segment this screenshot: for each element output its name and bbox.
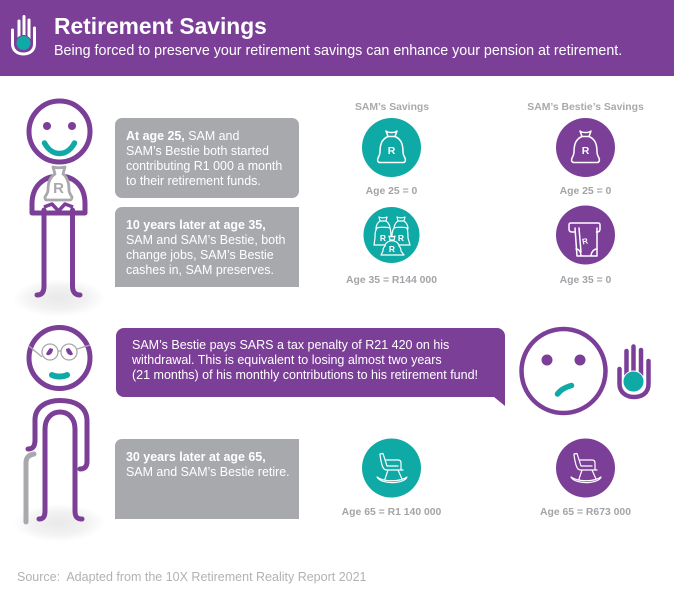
icon: SAM money bag age 25: R <box>388 145 396 157</box>
label: Bestie age 25: Age 25 = 0 <box>560 186 612 197</box>
heading: SAM's savings: SAM’s Savings <box>355 102 429 113</box>
icon: Bestie money bag age 25 <box>556 118 615 177</box>
icon: Bestie ATM cash age 35: R <box>581 236 589 246</box>
speech bubble: tax penalty: (21 months) of his monthly contributions to his retirement fund! <box>132 368 478 382</box>
icon: SAM money bags age 35: R <box>389 244 395 254</box>
panel: age 35 text: change jobs, SAM’s Bestie <box>126 248 274 262</box>
label: SAM age 25: Age 25 = 0 <box>366 186 418 197</box>
panel: age 65 text: 30 years later at age 65, <box>126 450 266 464</box>
character: SAM holding money bag <box>13 101 105 317</box>
panel: age 25 text: At age 25, SAM and <box>126 129 239 143</box>
icon: Bestie money bag age 25: R <box>582 145 590 157</box>
panel: age 65 text: SAM and SAM’s Bestie retire. <box>126 465 290 479</box>
panel: age 25 text: to their retirement funds. <box>126 174 261 188</box>
icon: glasses <box>29 344 90 360</box>
panel: age 35 text: cashes in, SAM preserves. <box>126 263 274 277</box>
heading: SAM's Bestie's savings: SAM’s Bestie’s Savings <box>527 102 644 113</box>
icon: Bestie ATM cash age 35 <box>556 206 615 264</box>
icon: stop hand <box>620 346 648 397</box>
icon: SAM money bags age 35: R <box>398 233 404 243</box>
icon: SAM money bags age 35 <box>364 207 420 263</box>
label: SAM age 65: Age 65 = R1 140 000 <box>342 507 442 518</box>
subtitle: Being forced to preserve your retirement savings can enhance your pension at retirement. <box>54 43 622 59</box>
icon: SAM rocking chair <box>362 438 421 498</box>
panel: age 35 text: SAM and SAM’s Bestie, both <box>126 233 286 247</box>
icon: SAM money bag age 25 <box>362 118 421 177</box>
icon: Bestie rocking chair <box>556 438 615 498</box>
icon: hand logo <box>12 16 34 54</box>
panel: age 35 text: 10 years later at age 35, <box>126 218 266 232</box>
icon: grey money bag: R <box>53 180 64 197</box>
character: sad face <box>522 329 606 413</box>
panel: age 25 text: SAM’s Bestie both started <box>126 144 269 158</box>
icon: grey money bag <box>45 167 72 200</box>
panel: age 25 text: contributing R1 000 a month <box>126 159 282 173</box>
source note: Source: Adapted from the 10X Retirement Reality Report 2021 <box>17 570 367 584</box>
panel: age 65 text <box>115 439 299 519</box>
speech bubble: tax penalty: withdrawal. This is equivalent to losing almost two years <box>131 353 442 367</box>
label: Bestie age 35: Age 35 = 0 <box>560 275 612 286</box>
label: SAM age 35: Age 35 = R144 000 <box>346 275 437 286</box>
panel: age 35 text <box>115 207 299 287</box>
label: Bestie age 65: Age 65 = R673 000 <box>540 507 631 518</box>
panel: age 25 text <box>115 118 299 198</box>
header banner <box>0 0 674 76</box>
title: Retirement Savings <box>54 13 267 39</box>
character: SAM's Bestie old man with cane <box>13 328 105 542</box>
speech bubble: tax penalty: SAM’s Bestie pays SARS a tax penalty of R21 420 on his <box>132 338 449 352</box>
speech bubble: tax penalty <box>116 328 505 406</box>
icon: SAM money bags age 35: R <box>380 233 386 243</box>
